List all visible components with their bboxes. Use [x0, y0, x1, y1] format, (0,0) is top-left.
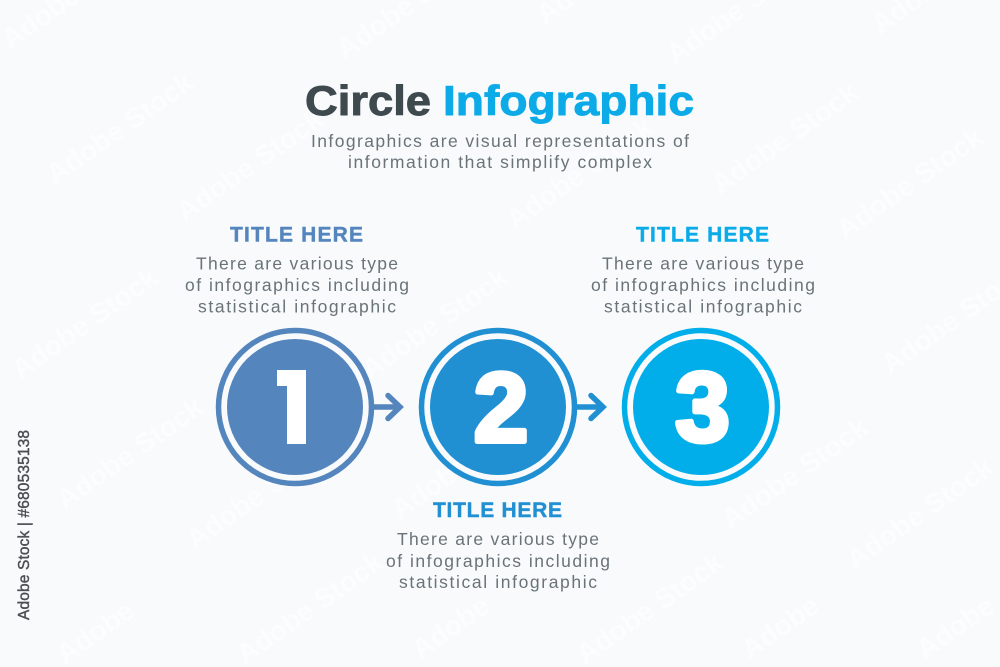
step 1 description: statistical infographic — [198, 296, 396, 316]
infographic canvas: Adobe Stock — [706, 76, 864, 200]
infographic canvas: Adobe Stock — [571, 546, 729, 667]
step 2 description: statistical infographic — [399, 572, 597, 592]
circle: step 3 — [624, 330, 778, 484]
step 1 description: of infographics including — [185, 275, 409, 295]
step 3 heading: TITLE HERE — [636, 224, 769, 246]
subtitle — [311, 131, 689, 172]
infographic canvas: Adobe Stock — [51, 391, 209, 515]
stock id side label: Adobe Stock | #680535138 — [16, 430, 33, 620]
number 1: 1 — [264, 351, 322, 467]
arrow: step 2 to step 3 — [575, 396, 603, 418]
step 3 text block — [591, 224, 815, 316]
infographic canvas: Adobe — [911, 590, 1000, 665]
infographic canvas: Adobe Stock — [386, 401, 544, 525]
arrow: step 1 to step 2 — [372, 396, 400, 418]
step 2 description: There are various type — [397, 529, 599, 549]
step 1 description: There are various type — [196, 254, 398, 274]
title: Circle — [305, 77, 431, 124]
infographic canvas: Adobe Stock — [716, 411, 874, 535]
circle: step 1 — [218, 330, 372, 484]
step 1 heading: TITLE HERE — [230, 224, 363, 246]
step 3 description: statistical infographic — [604, 296, 802, 316]
infographic canvas: Adobe Stock — [356, 261, 514, 385]
infographic canvas: Adobe Stock — [841, 451, 999, 575]
infographic canvas: Adobe Stock — [231, 546, 389, 667]
step 2 description — [386, 529, 610, 592]
number 3: 3 — [675, 352, 730, 462]
step 1 description — [185, 254, 409, 316]
infographic canvas: Adobe Stock — [41, 66, 199, 190]
infographic canvas: Adobe Stock — [501, 111, 659, 235]
infographic canvas: Adobe Stock — [831, 121, 989, 245]
subtitle: Infographics are visual representations of — [311, 131, 689, 151]
step 2 text block — [386, 499, 610, 592]
step 3 description — [591, 254, 815, 316]
number 2: 2 — [474, 352, 528, 462]
step 1 text block — [185, 224, 409, 316]
step 3 description: There are various type — [602, 254, 804, 274]
circle: step 2 — [422, 330, 574, 484]
infographic canvas: Adobe Stock — [181, 431, 339, 555]
step 2 heading: TITLE HERE — [433, 499, 562, 522]
infographic canvas: Adobe Stock — [171, 103, 329, 227]
infographic canvas — [17, 84, 814, 620]
infographic canvas: Adobe — [406, 590, 495, 665]
infographic canvas: Adobe — [736, 590, 825, 665]
infographic canvas: Adobe Stock — [6, 261, 164, 385]
step 3 description: of infographics including — [591, 275, 815, 295]
subtitle: information that simplify complex — [348, 152, 652, 172]
step 2 description: of infographics including — [386, 551, 610, 571]
title: Infographic — [443, 77, 694, 124]
